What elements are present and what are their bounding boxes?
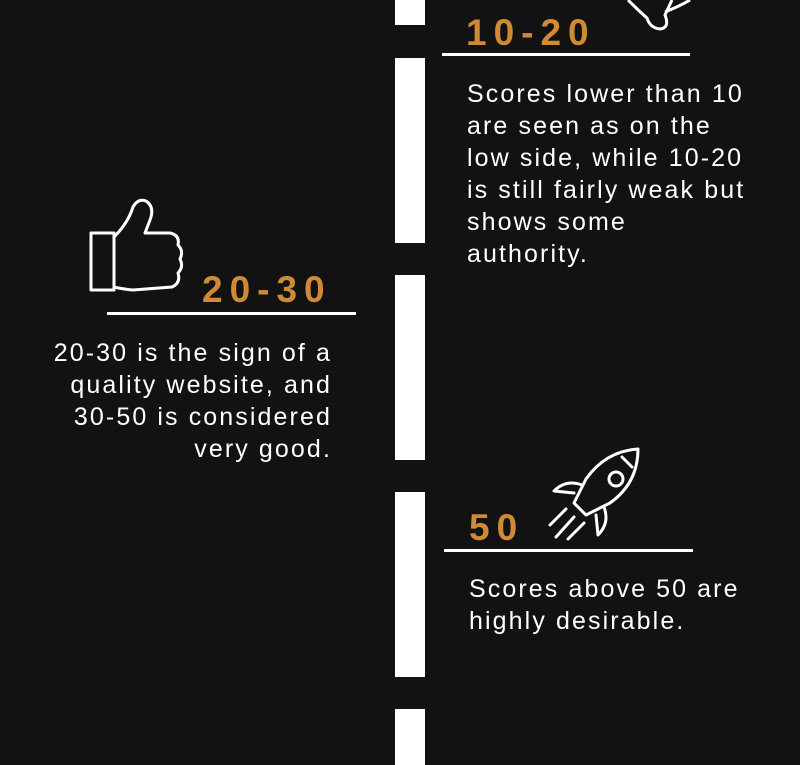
text: 10-20 description: shows some — [467, 208, 627, 236]
text: 10-20 description — [467, 80, 745, 268]
heading: 20-30: 20-30 — [202, 269, 332, 310]
text: 50 description: highly desirable. — [469, 607, 685, 635]
text: 20-30 description: quality website, and — [70, 371, 332, 399]
text: 10-20 description: low side, while 10-20 — [467, 144, 743, 172]
text: 20-30 description — [54, 339, 332, 463]
text: 50 description: Scores above 50 are — [469, 575, 740, 603]
heading: 50: 50 — [469, 507, 524, 548]
text: 10-20 description: Scores lower than 10 — [467, 80, 744, 108]
text: 10-20 description: authority. — [467, 240, 589, 268]
icon: rocket — [548, 448, 640, 541]
text: 50 description — [469, 575, 740, 635]
icon: partial top icon — [627, 0, 691, 30]
timeline dashed bar — [395, 0, 425, 765]
heading: 10-20: 10-20 — [466, 12, 596, 53]
text: 20-30 description: 20-30 is the sign of a — [54, 339, 332, 367]
text: 10-20 description: are seen as on the — [467, 112, 712, 140]
text: 20-30 description: 30-50 is considered — [74, 403, 332, 431]
icon: thumbs up — [90, 198, 184, 292]
text: 10-20 description: is still fairly weak but — [467, 176, 745, 204]
text: 20-30 description: very good. — [194, 435, 332, 463]
